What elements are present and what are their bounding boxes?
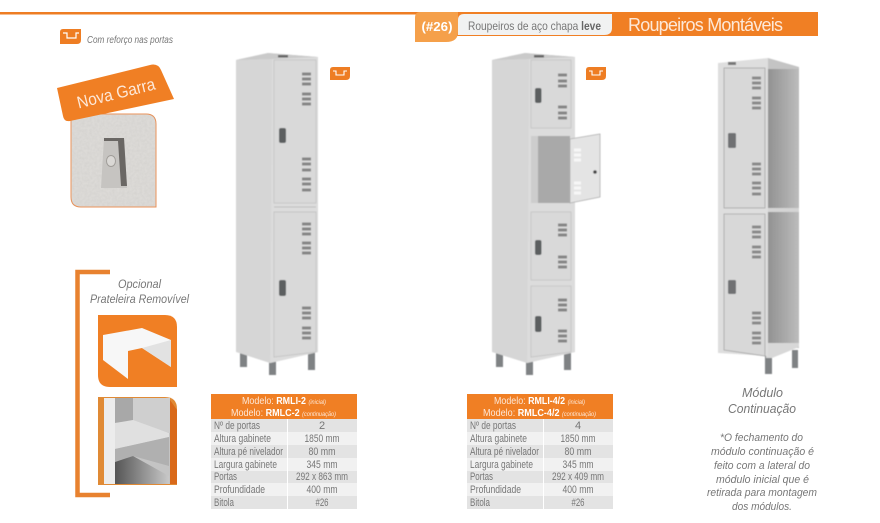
icon: reinforced door marker 2 bbox=[586, 67, 606, 80]
label: optional removable shelf: Prateleira Removível bbox=[90, 292, 189, 306]
table rows: #26 bbox=[316, 497, 328, 509]
table rows: Portas bbox=[470, 471, 493, 483]
table rows: Nº de portas bbox=[214, 420, 260, 432]
table rows: Profundidade bbox=[470, 484, 521, 496]
banner: Nova Garra bbox=[57, 65, 174, 121]
table rows: #26 bbox=[572, 497, 584, 509]
table: RMLI-2 specifications bbox=[211, 394, 357, 509]
table rows: 292 x 409 mm bbox=[552, 471, 604, 483]
banner: Nova Garra: Nova Garra bbox=[75, 74, 158, 112]
table rows: 400 mm bbox=[562, 484, 594, 496]
locks bbox=[535, 88, 542, 103]
note: closing of the continuation module: *O fechamento do bbox=[720, 432, 803, 444]
table header: Modelo: RMLI-2 (inicial) bbox=[242, 395, 326, 407]
table rows: Largura gabinete bbox=[214, 459, 277, 471]
series tab: (#26) bbox=[422, 19, 452, 34]
vents bbox=[752, 78, 761, 343]
table rows: Profundidade bbox=[214, 484, 265, 496]
vents bbox=[302, 74, 311, 338]
table rows: 80 mm bbox=[308, 446, 336, 458]
icon: reinforced door marker 1 bbox=[330, 67, 350, 80]
subtitle strip bbox=[458, 14, 612, 35]
photo: new latch detail bbox=[71, 114, 156, 207]
label: optional removable shelf bbox=[90, 277, 189, 306]
locker: RMLI-4/2 four doors, one open bbox=[492, 53, 600, 375]
legs bbox=[240, 352, 315, 375]
table header: Modelo: RMLI-4/2 (inicial) bbox=[494, 395, 585, 407]
section title: Roupeiros Montáveis bbox=[628, 15, 783, 35]
legend: reinforcement icon and label bbox=[60, 29, 173, 46]
brand plate bbox=[728, 62, 736, 65]
open door bbox=[570, 134, 600, 203]
caption: continuation module: Continuação bbox=[728, 401, 796, 416]
photo: shelf installed in locker bbox=[98, 397, 177, 485]
upper door bbox=[274, 60, 316, 203]
header band bbox=[0, 12, 818, 42]
table rows: 1850 mm bbox=[560, 433, 596, 445]
table rows: 400 mm bbox=[306, 484, 338, 496]
note: closing of the continuation module: feito com a lateral do bbox=[714, 460, 810, 472]
door 1 bbox=[531, 60, 571, 128]
note: closing of the continuation module: dos módulos. bbox=[732, 501, 792, 513]
panel: shelf illustration bbox=[98, 315, 177, 387]
cabinet body bbox=[492, 53, 575, 363]
table: RMLI-4/2 specifications bbox=[467, 394, 613, 509]
bracket: optional shelf bbox=[78, 272, 110, 495]
locks bbox=[279, 128, 286, 143]
note: closing of the continuation module: módulo inicial que é bbox=[716, 474, 809, 486]
table header: Modelo: RMLC-4/2 (continuação) bbox=[483, 407, 596, 419]
table header: Modelo: RMLC-2 (continuação) bbox=[231, 407, 336, 419]
upper door bbox=[724, 68, 765, 208]
open side cavity bbox=[766, 68, 799, 348]
table rows bbox=[211, 419, 357, 509]
subtitle strip: Roupeiros de aço chapa leve bbox=[468, 19, 601, 33]
note: closing of the continuation module: retirada para montagem bbox=[707, 487, 817, 499]
legend: reinforcement icon and label: Com reforço nas portas bbox=[87, 35, 173, 46]
brand plate bbox=[278, 55, 288, 58]
table rows: Altura pé nivelador bbox=[214, 446, 283, 458]
table rows: Bitola bbox=[214, 497, 235, 509]
door 4 bbox=[531, 286, 571, 357]
table rows: 80 mm bbox=[564, 446, 592, 458]
table rows: Nº de portas bbox=[470, 420, 516, 432]
locks bbox=[728, 133, 736, 148]
table header bbox=[211, 394, 357, 419]
table rows: Altura gabinete bbox=[214, 433, 271, 445]
lower door bbox=[274, 212, 316, 357]
locker: continuation module bbox=[718, 58, 799, 374]
vents bbox=[558, 75, 567, 341]
note: closing of the continuation module: módulo continuação é bbox=[711, 446, 814, 458]
table rows: 1850 mm bbox=[304, 433, 340, 445]
table rows: 345 mm bbox=[306, 459, 338, 471]
front frame bbox=[718, 58, 768, 356]
table rows: Altura gabinete bbox=[470, 433, 527, 445]
legs bbox=[765, 350, 798, 374]
series tab bbox=[415, 12, 458, 42]
locker: RMLI-2 two doors bbox=[236, 53, 318, 375]
table rows: Largura gabinete bbox=[470, 459, 533, 471]
door 3 bbox=[531, 212, 571, 280]
cabinet body bbox=[236, 53, 318, 363]
caption: continuation module bbox=[728, 385, 796, 416]
table rows: 4 bbox=[575, 420, 581, 432]
table rows: 292 x 863 mm bbox=[296, 471, 348, 483]
table rows: Portas bbox=[214, 471, 237, 483]
table rows: 345 mm bbox=[562, 459, 594, 471]
table rows bbox=[467, 419, 613, 509]
brand plate bbox=[534, 55, 544, 58]
caption: continuation module: Módulo bbox=[742, 385, 783, 400]
open compartment bbox=[531, 136, 570, 203]
table header bbox=[467, 394, 613, 419]
label: optional removable shelf: Opcional bbox=[118, 277, 161, 291]
table rows: 2 bbox=[319, 420, 325, 432]
table rows: Altura pé nivelador bbox=[470, 446, 539, 458]
table rows: Bitola bbox=[470, 497, 491, 509]
note: closing of the continuation module bbox=[707, 432, 817, 513]
lower door bbox=[724, 214, 765, 356]
legs bbox=[496, 352, 571, 375]
